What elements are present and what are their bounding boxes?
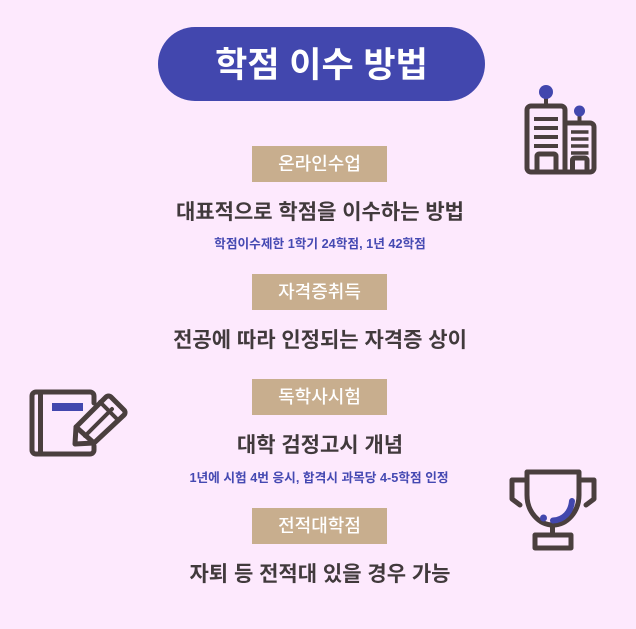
tag: 전적대학점: [252, 508, 387, 544]
tag: 온라인수업: 온라인수업: [278, 154, 361, 174]
heading: 대표적으로 학점을 이수하는 방법: 대표적으로 학점을 이수하는 방법: [176, 201, 464, 224]
heading: 자퇴 등 전적대 있을 경우 가능: 자퇴 등 전적대 있을 경우 가능: [189, 563, 450, 586]
title: [158, 27, 485, 101]
note: credit limit: 학점이수제한 1학기 24학점, 1년 42학점: [214, 237, 426, 251]
tag: 자격증취득: 자격증취득: [278, 282, 361, 302]
tag: 독학사시험: 독학사시험: [278, 387, 361, 407]
tag: 전적대학점: 전적대학점: [278, 516, 361, 536]
tag: 독학사시험: [252, 379, 387, 415]
icon: trophy: [510, 470, 596, 550]
tag: 자격증취득: [252, 274, 387, 310]
heading: 대학 검정고시 개념: 대학 검정고시 개념: [237, 434, 403, 457]
title: 학점 이수 방법: [215, 46, 428, 85]
heading: 전공에 따라 인정되는 자격증 상이: 전공에 따라 인정되는 자격증 상이: [173, 329, 467, 352]
icon: buildings: [524, 85, 596, 174]
note: exam rules: 1년에 시험 4번 응시, 합격시 과목당 4-5학점 인정: [189, 471, 449, 485]
icon: notebook and pencil: [30, 390, 128, 456]
tag: 온라인수업: [252, 146, 387, 182]
